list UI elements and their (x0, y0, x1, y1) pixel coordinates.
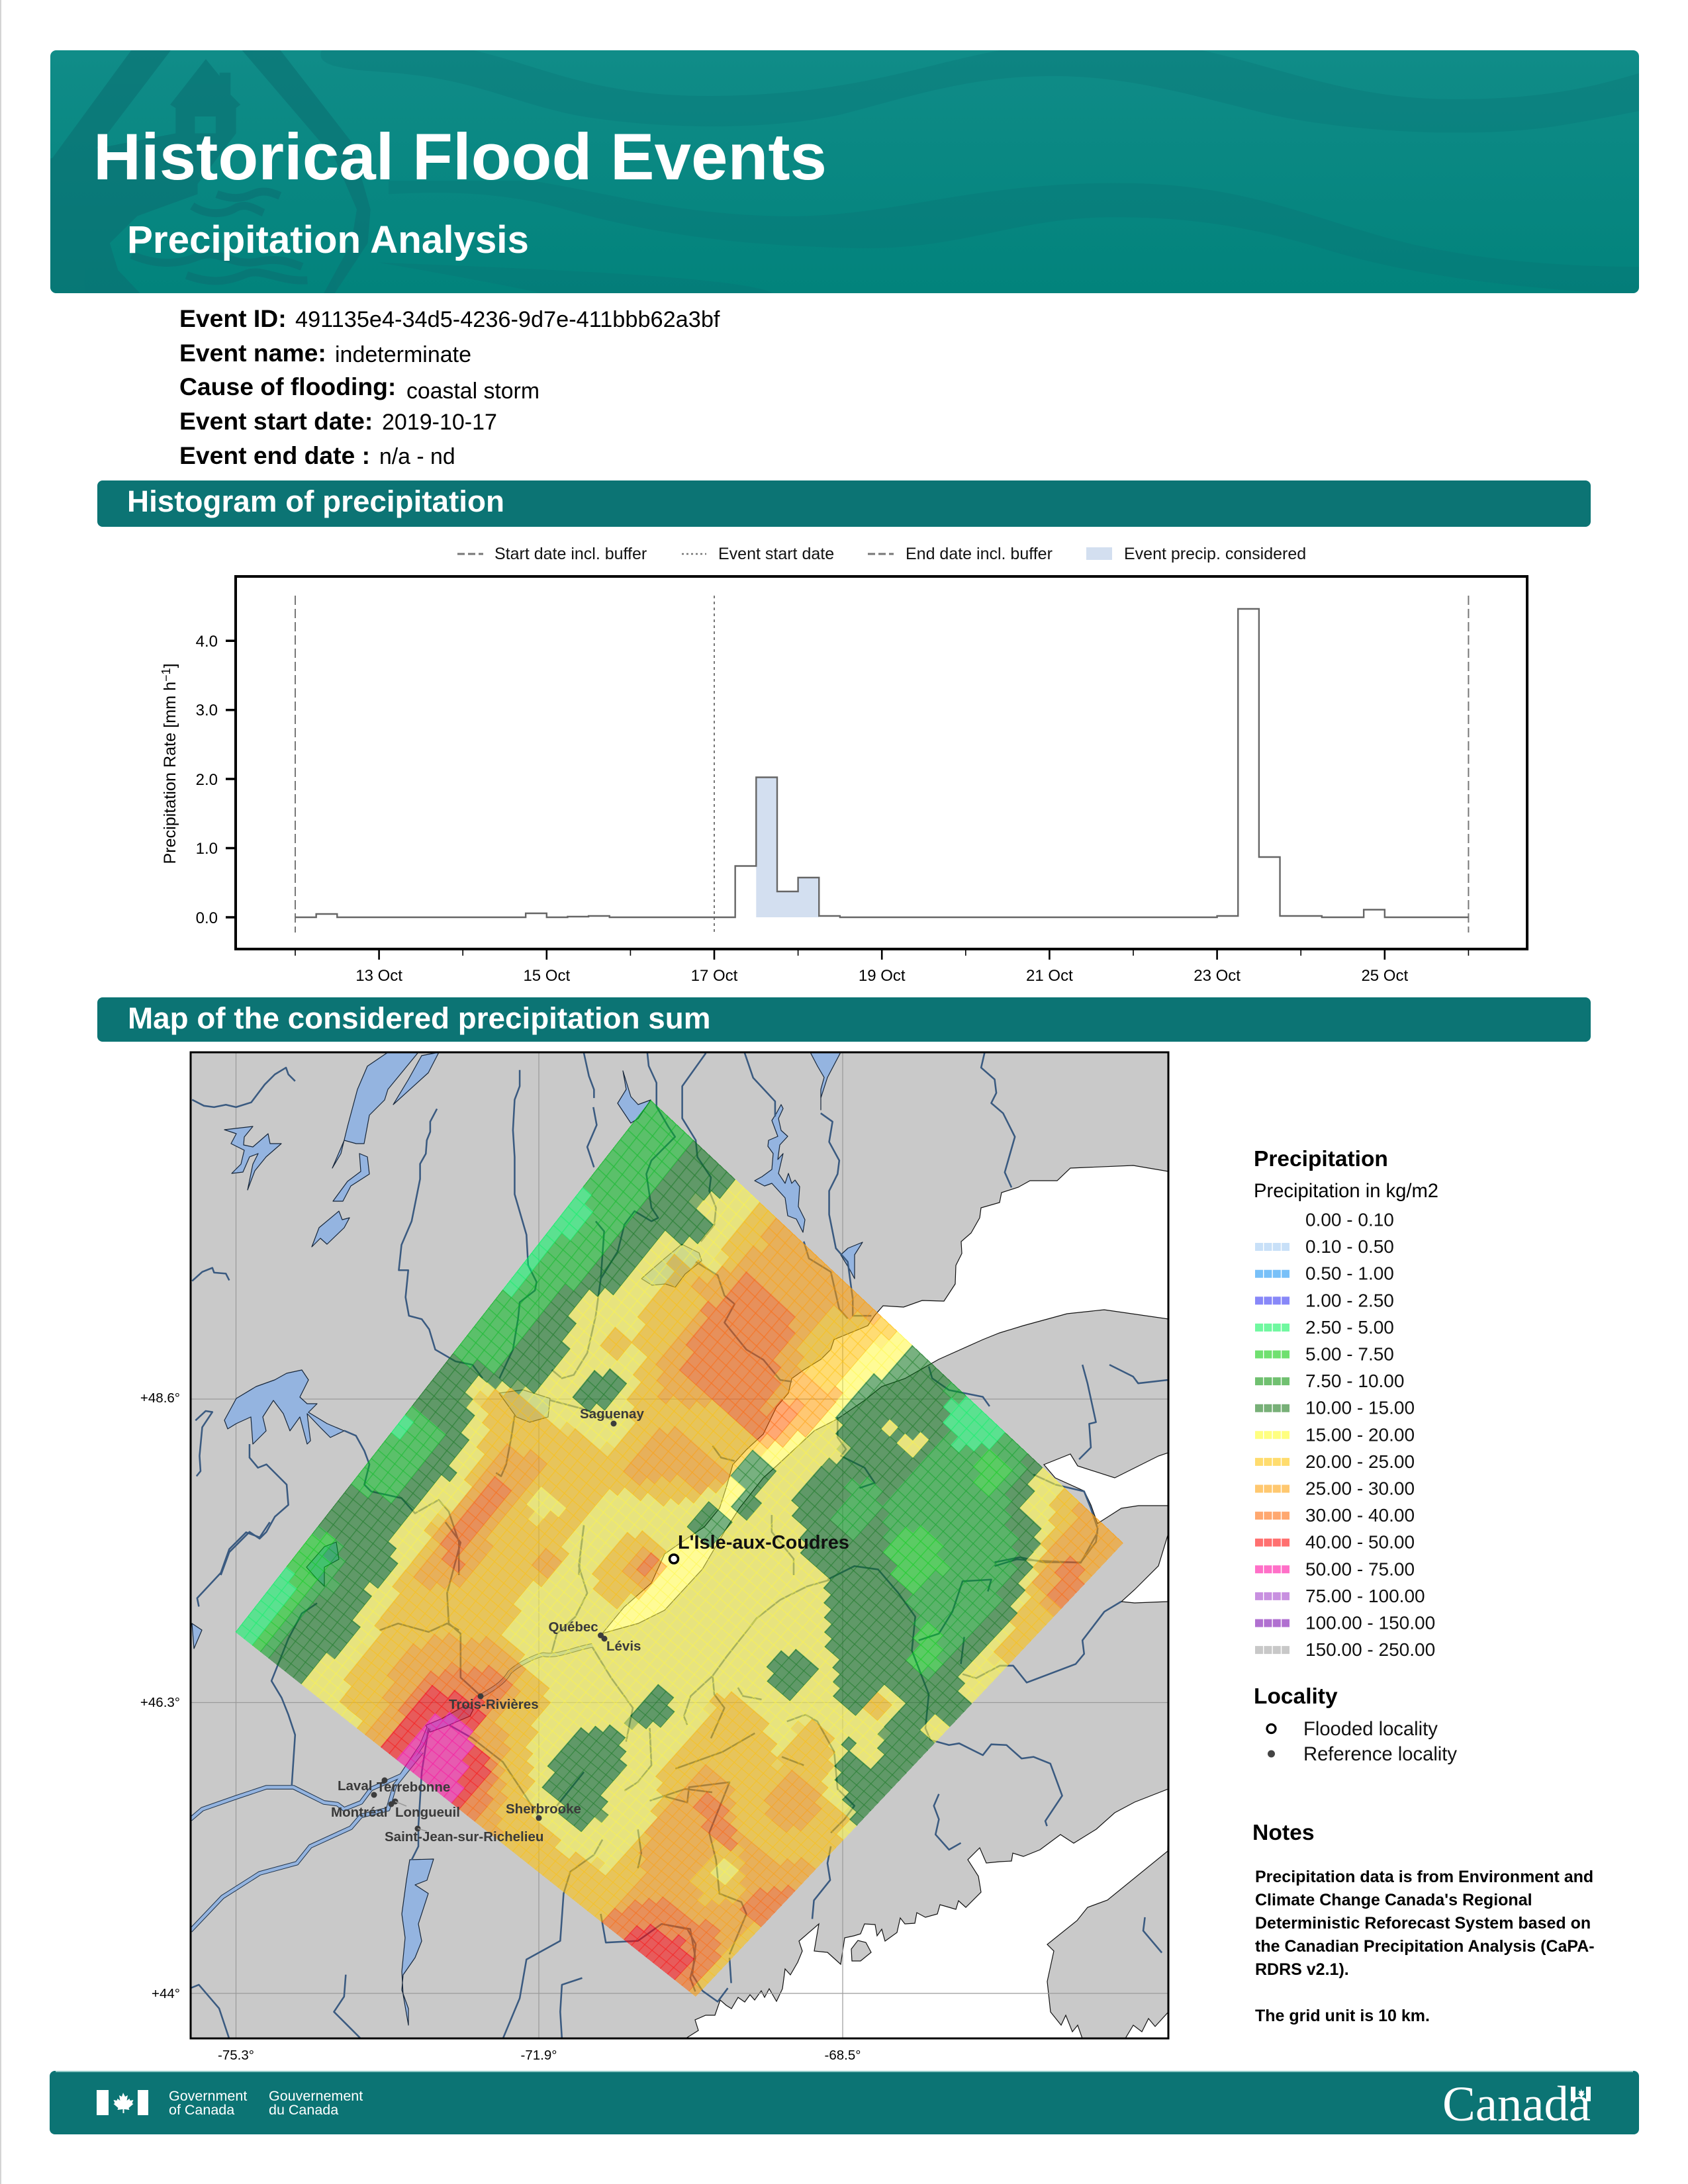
map graticule (191, 1052, 1168, 2038)
heading: histogram (97, 480, 1591, 527)
x axis ticks and labels: 25 Oct (1361, 967, 1408, 985)
locality legend: Reference locality (1303, 1744, 1457, 1765)
x axis ticks and labels: 13 Oct (355, 967, 402, 985)
precipitation legend: Precipitation in kg/m2 (1254, 1181, 1438, 1202)
water: northeast bay (1121, 1535, 1168, 1603)
banner wave bands (320, 50, 1648, 296)
subtitle: Precipitation Analysis (127, 218, 529, 261)
y axis title: ] (161, 663, 179, 668)
x axis ticks and labels: 19 Oct (859, 967, 906, 985)
event metadata: Event name: (179, 339, 326, 367)
event metadata: Event end date : (179, 441, 370, 469)
water: eastern bay (1044, 1453, 1168, 1524)
reference localities: Québec (548, 1619, 598, 1635)
reference localities: Montréal (331, 1805, 387, 1820)
legend class labels: 10.00 - 15.00 (1305, 1398, 1415, 1418)
event metadata: 2019-10-17 (382, 410, 497, 435)
x axis ticks and labels: 21 Oct (1026, 967, 1073, 985)
cell outlines (236, 1100, 1123, 1997)
notes: Climate Change Canada's Regional (1255, 1891, 1532, 1909)
event metadata: coastal storm (406, 379, 539, 404)
legend class labels: 15.00 - 20.00 (1305, 1424, 1415, 1445)
buffer and event date lines (295, 596, 1468, 933)
notes: RDRS v2.1). (1255, 1960, 1349, 1979)
government wordmark text: Gouvernement (269, 2088, 363, 2104)
reference localities: Saguenay (580, 1406, 644, 1422)
heading: map (97, 997, 1591, 1042)
reference localities: Terrebonne (377, 1780, 450, 1795)
legend class labels: 30.00 - 40.00 (1305, 1505, 1415, 1525)
legend class labels: 75.00 - 100.00 (1305, 1586, 1425, 1606)
reference localities: Longueuil (395, 1805, 460, 1820)
legend class labels: 50.00 - 75.00 (1305, 1559, 1415, 1579)
locality legend (1254, 1684, 1457, 1765)
legend class labels: 100.00 - 150.00 (1305, 1612, 1435, 1633)
y axis title: Precipitation Rate [mm h (161, 682, 179, 864)
heading: map: Map of the considered precipitation sum (128, 1001, 710, 1035)
rivers northeast (682, 1053, 1168, 1575)
reference localities: Lévis (606, 1639, 641, 1654)
event metadata: Event ID: (179, 304, 287, 332)
x axis ticks and labels: 15 Oct (523, 967, 570, 985)
legend class labels: 0.00 - 0.10 (1305, 1210, 1394, 1230)
event metadata: Cause of flooding: (179, 373, 396, 400)
reference localities: Trois-Rivières (449, 1697, 539, 1712)
event metadata (179, 304, 720, 469)
event metadata: indeterminate (335, 342, 471, 367)
legend class labels: 0.50 - 1.00 (1305, 1263, 1394, 1284)
histogram chart legend: Event precip. considered (1124, 545, 1306, 563)
reference localities (331, 1406, 644, 1844)
histogram chart legend: Start date incl. buffer (494, 545, 647, 563)
notes: Precipitation data is from Environment and (1255, 1868, 1593, 1886)
lakes (192, 1052, 863, 2025)
government wordmark text: du Canada (269, 2102, 338, 2118)
map coordinate labels: -75.3° (218, 2048, 254, 2063)
rivers southeast (662, 1532, 1162, 2001)
heading: histogram: Histogram of precipitation (127, 484, 504, 518)
event metadata: n/a - nd (379, 444, 455, 469)
banner flood logo watermark (50, 50, 371, 293)
legend class labels: 25.00 - 30.00 (1305, 1479, 1415, 1498)
locality legend: Locality (1254, 1684, 1338, 1709)
legend class labels: 1.00 - 2.50 (1305, 1290, 1394, 1310)
government wordmark text: of Canada (169, 2102, 234, 2118)
map coordinate labels (140, 1390, 861, 2063)
water: gulf of Maine and Bay of Fundy (686, 1789, 1168, 2038)
precipitation grid overlay (236, 1100, 1123, 1997)
footer bar (50, 2071, 1639, 2134)
map coordinate labels: +44° (152, 1986, 180, 2001)
x axis ticks and labels (295, 949, 1468, 985)
reference localities: Sherbrooke (506, 1801, 581, 1817)
x axis ticks and labels: 23 Oct (1194, 967, 1241, 985)
base map (191, 1052, 1168, 2039)
government wordmark text: Government (169, 2088, 247, 2104)
flooded locality (670, 1532, 849, 1563)
map coordinate labels: +46.3° (140, 1695, 180, 1710)
event metadata: 491135e4-34d5-4236-9d7e-411bbb62a3bf (295, 307, 720, 332)
main title: Historical Flood Events (93, 120, 827, 193)
rivers northwest (192, 1053, 675, 1575)
legend class labels: 0.10 - 0.50 (1305, 1236, 1394, 1257)
notes: Deterministic Reforecast System based on (1255, 1914, 1591, 1933)
y axis ticks and labels: 0.0 (196, 909, 218, 927)
event metadata: Event start date: (179, 407, 373, 435)
map coordinate labels: -68.5° (825, 2048, 861, 2063)
x axis ticks and labels: 17 Oct (691, 967, 738, 985)
legend class labels (1305, 1210, 1435, 1660)
event precipitation area (756, 777, 819, 917)
y axis title: −1 (160, 668, 173, 682)
y axis ticks and labels (196, 633, 235, 927)
water: St Lawrence estuary (602, 1165, 1168, 1633)
legend class labels: 20.00 - 25.00 (1305, 1451, 1415, 1472)
notes: Notes (1252, 1820, 1315, 1845)
notes (1252, 1820, 1595, 2025)
legend class labels: 150.00 - 250.00 (1305, 1639, 1435, 1660)
precipitation legend (1254, 1147, 1438, 1660)
legend class labels: 5.00 - 7.50 (1305, 1343, 1394, 1365)
y axis ticks and labels: 2.0 (196, 771, 218, 789)
precipitation legend: Precipitation (1254, 1147, 1388, 1171)
notes: the Canadian Precipitation Analysis (CaPA- (1255, 1937, 1595, 1956)
flooded locality: L'Isle-aux-Coudres (678, 1532, 849, 1553)
government wordmark text (169, 2088, 363, 2118)
histogram chart (160, 576, 1527, 985)
chart frame (236, 576, 1527, 949)
reference localities: Saint-Jean-sur-Richelieu (385, 1829, 543, 1844)
rivers southwest (191, 1522, 712, 2039)
water: southeast inlets (1125, 2012, 1168, 2038)
notes: The grid unit is 10 km. (1255, 2007, 1430, 2025)
legend class labels: 7.50 - 10.00 (1305, 1371, 1404, 1391)
Canada wordmark: Canada (1442, 2077, 1591, 2132)
y axis ticks and labels: 4.0 (196, 633, 218, 651)
island (851, 1940, 871, 1961)
reference localities: Laval (338, 1778, 372, 1794)
histogram chart legend: Event start date (718, 545, 834, 563)
y axis ticks and labels: 1.0 (196, 840, 218, 858)
map frame (191, 1052, 1168, 2038)
locality legend: Flooded locality (1303, 1719, 1438, 1740)
histogram chart legend (457, 545, 1306, 563)
y axis ticks and labels: 3.0 (196, 702, 218, 719)
legend swatches (1255, 1247, 1289, 1650)
histogram chart legend: End date incl. buffer (906, 545, 1053, 563)
legend class labels: 40.00 - 50.00 (1305, 1532, 1415, 1553)
precipitation cells (236, 1100, 1123, 1997)
Government of Canada flag signature (97, 2090, 148, 2115)
map coordinate labels: +48.6° (140, 1390, 180, 1406)
map coordinate labels: -71.9° (521, 2048, 557, 2063)
header banner (50, 50, 1648, 296)
legend class labels: 2.50 - 5.00 (1305, 1317, 1394, 1338)
precipitation step line (295, 609, 1468, 917)
